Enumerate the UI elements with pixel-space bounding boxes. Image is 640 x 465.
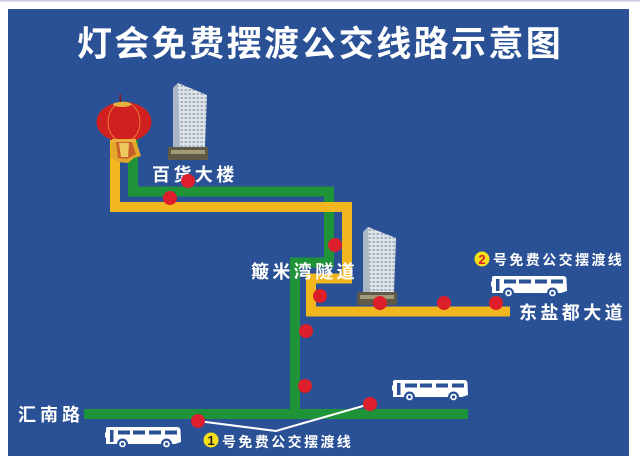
icon: red lantern: [96, 94, 152, 163]
label: 簸米湾隧道: 簸米湾隧道: [251, 261, 358, 282]
legend: line 2: 号免费公交摆渡线: [493, 252, 624, 268]
icon: bus at line 1 start: [105, 427, 181, 448]
icon: tower building 2: [357, 227, 397, 305]
label: 东盐都大道: 东盐都大道: [519, 302, 626, 323]
icon: tower building 1: [168, 83, 208, 160]
legend: line 2: 2: [478, 252, 486, 267]
icon: bus at line 2 end: [491, 276, 567, 297]
connector: white leader line: [198, 404, 370, 431]
legend: line 1: 号免费公交摆渡线: [222, 434, 353, 450]
label: 百货大楼: 百货大楼: [152, 164, 238, 185]
title: 灯会免费摆渡公交线路示意图: [77, 25, 563, 64]
stops: red dots: [163, 174, 503, 428]
legend: line 1: 1: [207, 433, 215, 448]
label: 汇南路: 汇南路: [18, 405, 84, 425]
yellow route: line 2: [115, 140, 510, 312]
green route: line 1: [84, 140, 468, 414]
icon: bus at line 1 end: [392, 380, 468, 401]
